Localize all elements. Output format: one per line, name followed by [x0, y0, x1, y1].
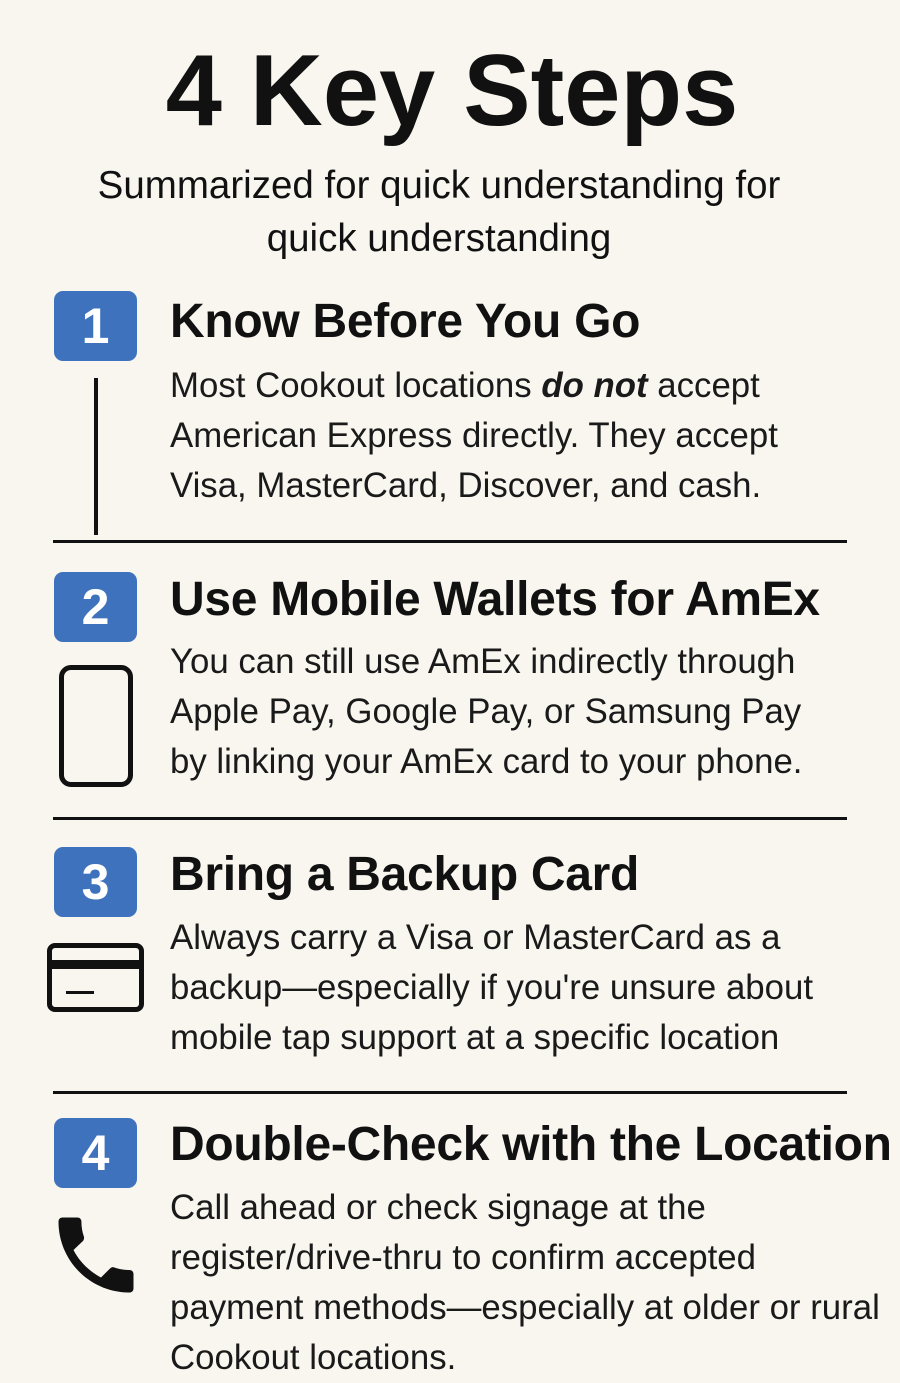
body 1 — [170, 366, 778, 505]
body 2: You can still use AmEx indirectly through — [170, 642, 795, 681]
body 3: Always carry a Visa or MasterCard as a — [170, 918, 780, 957]
badge 4 — [54, 1118, 137, 1188]
body 4 — [170, 1188, 880, 1377]
badge 3: 3 — [82, 854, 109, 910]
body 1: Most Cookout locations do not accept — [170, 366, 760, 405]
badge 1: 1 — [82, 298, 109, 354]
badge 2: 2 — [82, 579, 109, 635]
body 2: by linking your AmEx card to your phone. — [170, 742, 802, 781]
subtitle: Summarized for quick understanding for — [98, 164, 780, 207]
heading 2: Use Mobile Wallets for AmEx — [170, 573, 820, 626]
body 3: mobile tap support at a specific location — [170, 1018, 779, 1057]
icon: vertical line — [94, 378, 98, 535]
body 4: register/drive-thru to confirm accepted — [170, 1238, 756, 1277]
body 2: Apple Pay, Google Pay, or Samsung Pay — [170, 692, 801, 731]
step 1 — [54, 291, 778, 535]
badge 1 — [54, 291, 137, 361]
step 3 — [47, 847, 813, 1057]
body 4: Cookout locations. — [170, 1338, 456, 1377]
step 2 — [54, 572, 820, 787]
step 4 — [54, 1118, 892, 1377]
heading 1: Know Before You Go — [170, 295, 640, 348]
icon: phone — [59, 665, 133, 787]
title: 4 Key Steps — [166, 35, 738, 147]
icon: credit card — [47, 943, 144, 1012]
heading 3: Bring a Backup Card — [170, 848, 639, 901]
badge 4: 4 — [82, 1125, 109, 1181]
badge 2 — [54, 572, 137, 642]
body 1: American Express directly. They accept — [170, 416, 778, 455]
heading 4: Double-Check with the Location — [170, 1118, 892, 1171]
subtitle — [98, 164, 780, 260]
subtitle: quick understanding — [267, 217, 611, 260]
body 1: Visa, MasterCard, Discover, and cash. — [170, 466, 761, 505]
body 3: backup—especially if you're unsure about — [170, 968, 813, 1007]
body 3 — [170, 918, 813, 1057]
body 4: Call ahead or check signage at the — [170, 1188, 706, 1227]
icon: phone handset — [58, 1218, 134, 1292]
body 4: payment methods—especially at older or rural — [170, 1288, 880, 1327]
badge 3 — [54, 847, 137, 917]
body 2 — [170, 642, 802, 781]
